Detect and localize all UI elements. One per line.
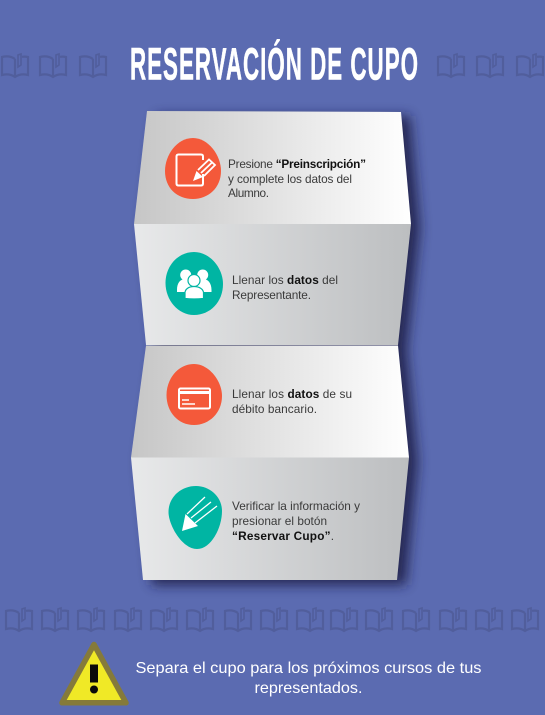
folded sheet	[131, 111, 420, 585]
panel: step 1	[134, 111, 411, 224]
panel: step 1: y complete los datos del	[228, 172, 352, 186]
panel: step 3	[131, 346, 409, 458]
top left book icons	[2, 54, 106, 77]
icon: edit form	[165, 138, 221, 199]
warning message	[136, 660, 482, 697]
panel: step 1: Alumno.	[228, 186, 269, 200]
icon: warning triangle	[62, 644, 126, 703]
text: step 1: Presione “Preinscripción”	[228, 157, 366, 171]
text: step 3: Llenar los datos de su	[232, 387, 352, 401]
icon: credit card	[166, 364, 222, 425]
warning message: representados.	[254, 680, 362, 697]
bottom book icons	[6, 608, 538, 631]
panel: step 4: “Reservar Cupo”.	[232, 529, 334, 543]
panel: step 2	[134, 224, 411, 345]
icon: pencil	[168, 486, 222, 549]
text: step 2: Llenar los datos del	[232, 273, 338, 287]
warning message: Separa el cupo para los próximos cursos de tus	[136, 660, 482, 677]
panel: step 3: débito bancario.	[232, 402, 317, 416]
panel: step 4: presionar el botón	[232, 514, 327, 528]
text: step 4: Verificar la información y	[232, 499, 360, 513]
top right book icons	[438, 54, 543, 77]
icon: people	[166, 252, 223, 315]
panel: step 4	[131, 458, 409, 580]
panel: step 2: Representante.	[232, 288, 311, 302]
